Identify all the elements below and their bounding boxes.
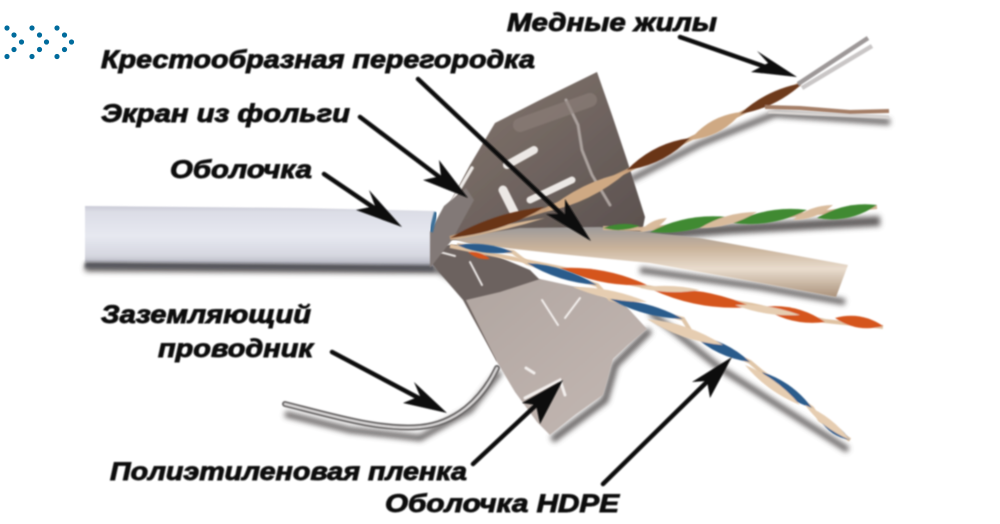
foil bottom crumple [432,245,545,362]
foil highlights [450,100,610,212]
arrow: Оболочка [324,174,402,227]
label: Оболочка: Оболочка [170,156,312,184]
sheath [85,206,434,266]
sheath bottom shade [85,262,434,271]
foil top flap [445,72,645,240]
arrow: Крестообразная перегородка [418,79,591,241]
orange pair [450,246,883,328]
polyethylene film [466,279,647,435]
cross divider ribbon [450,227,848,297]
arrow: Оболочка HDPE [603,357,732,484]
label: проводник: проводник [158,335,315,363]
label: Экран из фольги: Экран из фольги [101,100,350,128]
cable illustration [85,38,890,450]
blue pair [457,244,850,440]
ground wire [285,368,497,427]
green pair [603,204,877,233]
label: Крестообразная перегородка: Крестообразная перегородка [101,46,535,74]
arrow: Заземляющий проводник [332,352,447,413]
arrow: Полиэтиленовая пленка [473,380,563,464]
drop shadows [85,114,890,450]
label: Оболочка HDPE: Оболочка HDPE [385,490,621,518]
brown pair [450,38,889,240]
foil crumple highlights [440,252,512,303]
label: Медные жилы: Медные жилы [507,9,717,37]
foil bright crumple at cable end [430,188,474,268]
label: Полиэтиленовая пленка: Полиэтиленовая пленка [110,458,467,486]
icon: dotted chevrons [4,25,74,59]
arrow: Экран из фольги [360,117,468,198]
arrow: Медные жилы [680,37,797,77]
label: Заземляющий: Заземляющий [101,301,311,329]
